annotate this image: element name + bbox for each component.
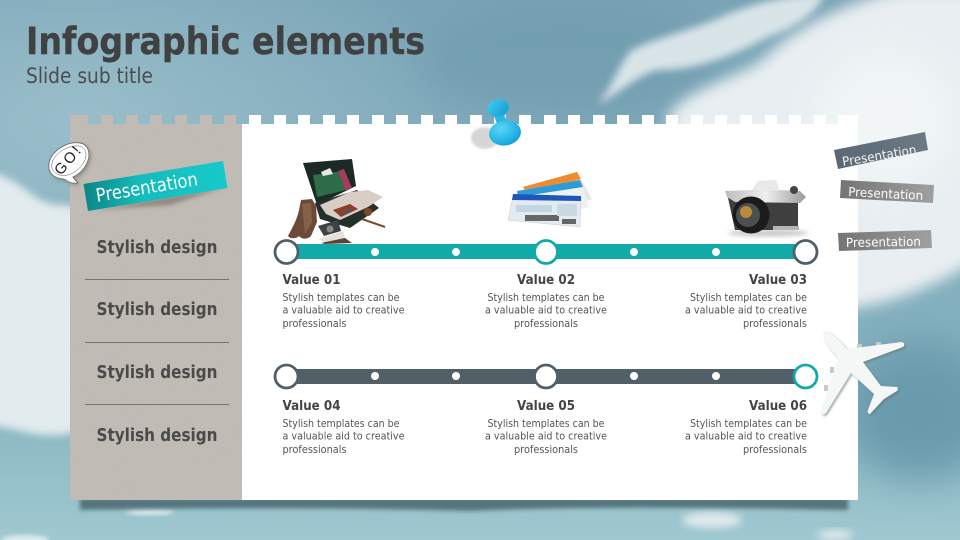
white sheet: [242, 115, 858, 500]
bar: [286, 369, 806, 384]
icon: GO speech bubble: GO!: [51, 143, 85, 179]
value 04 text: a valuable aid to creative: [282, 430, 404, 442]
item: stylish design 2: Stylish design: [96, 300, 218, 320]
bar: [286, 244, 806, 259]
value 04 text: Value 04: [282, 399, 340, 414]
value 02 text: Stylish templates can be: [488, 292, 604, 304]
value 02 text: [485, 273, 607, 330]
value 05 text: professionals: [514, 444, 578, 456]
value 05 text: a valuable aid to creative: [485, 430, 607, 442]
item: stylish design 3: Stylish design: [96, 363, 218, 383]
paper and books: [319, 231, 345, 243]
subtitle: Slide sub title: [26, 64, 153, 88]
value 05 text: Value 05: [517, 399, 575, 414]
paper shadow: [80, 498, 848, 511]
value 01 text: professionals: [282, 318, 346, 330]
node 02: [534, 240, 558, 264]
value 01 text: Value 01: [282, 273, 340, 288]
value 02 text: Value 02: [517, 273, 575, 288]
case body: [315, 190, 379, 228]
node 05: [534, 365, 558, 388]
value 05 text: [485, 399, 607, 456]
title: Infographic elements: [26, 20, 425, 63]
item: stylish design 1: Stylish design: [96, 238, 218, 258]
value 06 text: [685, 399, 807, 456]
panel: notepaper: [70, 115, 858, 500]
node 04: [275, 365, 298, 388]
value 03 text: a valuable aid to creative: [685, 304, 807, 316]
timeline: bottom: [275, 365, 817, 388]
tag: presentation teal: Presentation: [94, 169, 199, 207]
tag: presentation grey lower: [838, 230, 932, 251]
value 04 text: [282, 399, 404, 456]
value 06 text: Value 06: [749, 399, 807, 414]
tag: presentation slate: Presentation: [841, 142, 917, 169]
value 03 text: Stylish templates can be: [690, 292, 807, 304]
grey sidebar: [70, 115, 242, 500]
value 04 text: Stylish templates can be: [282, 418, 400, 430]
node 06: [794, 365, 817, 388]
small camera: [318, 220, 341, 236]
value 03 text: [685, 273, 807, 330]
tag: presentation grey: [840, 180, 934, 203]
value 06 text: a valuable aid to creative: [685, 430, 807, 442]
icon: camera: [725, 180, 808, 236]
icon: GO speech bubble: [49, 143, 91, 185]
value 05 text: Stylish templates can be: [488, 418, 604, 430]
tag: presentation grey lower: Presentation: [846, 234, 921, 250]
value 01 text: [282, 273, 404, 330]
icon: suitcase and boots: [288, 159, 385, 244]
tag: presentation grey: Presentation: [848, 184, 924, 203]
node 01: [275, 240, 298, 264]
value 06 text: Stylish templates can be: [690, 418, 807, 430]
item: stylish design 4: Stylish design: [96, 426, 218, 446]
value 03 text: Value 03: [749, 273, 807, 288]
icon: airplane: [821, 331, 906, 416]
value 01 text: a valuable aid to creative: [282, 304, 404, 316]
lid: [303, 159, 356, 205]
timeline: top: [275, 240, 817, 264]
value 01 text: Stylish templates can be: [282, 292, 400, 304]
tag: presentation teal: [84, 161, 228, 211]
icon: boarding passes: [508, 172, 592, 227]
icon: blue push pin: [471, 97, 523, 149]
value 06 text: professionals: [743, 444, 807, 456]
tag: presentation slate: [834, 132, 928, 169]
node 03: [794, 240, 817, 264]
value 04 text: professionals: [282, 444, 346, 456]
boots: [288, 199, 317, 239]
value 02 text: a valuable aid to creative: [485, 304, 607, 316]
value 03 text: professionals: [743, 318, 807, 330]
value 02 text: professionals: [514, 318, 578, 330]
sidebar list: [85, 238, 229, 446]
